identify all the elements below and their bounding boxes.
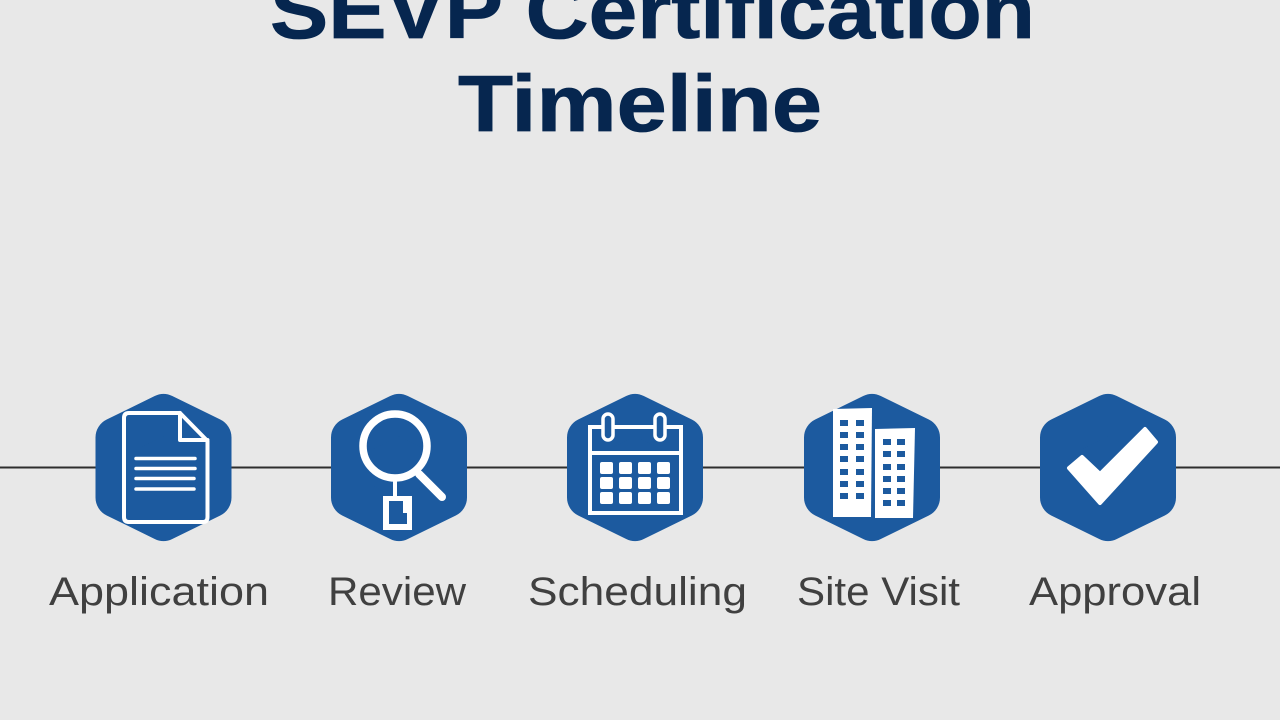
label: Review [328,570,466,614]
step: Site Visit [797,408,960,614]
icon: check mark [1069,429,1156,503]
timeline line [0,466,1280,468]
hexagon badge [1060,414,1156,521]
label: Scheduling [528,570,747,614]
step: Application [49,413,269,614]
label: Approval [1029,570,1201,614]
label: Site Visit [797,570,960,614]
title [270,0,1035,148]
step: Review [328,414,466,614]
icon: document [124,413,208,522]
step: Approval [1029,414,1201,614]
title: Timeline [458,59,822,148]
hexagon badge [587,414,683,521]
step: Scheduling [528,414,747,614]
hexagon badge [351,414,447,521]
icon: magnifier with document tag [363,414,442,530]
hexagon badge [116,414,212,521]
hexagon badge [824,414,920,521]
icon: buildings [833,408,915,518]
label: Application [49,570,269,614]
icon: calendar [590,414,681,513]
